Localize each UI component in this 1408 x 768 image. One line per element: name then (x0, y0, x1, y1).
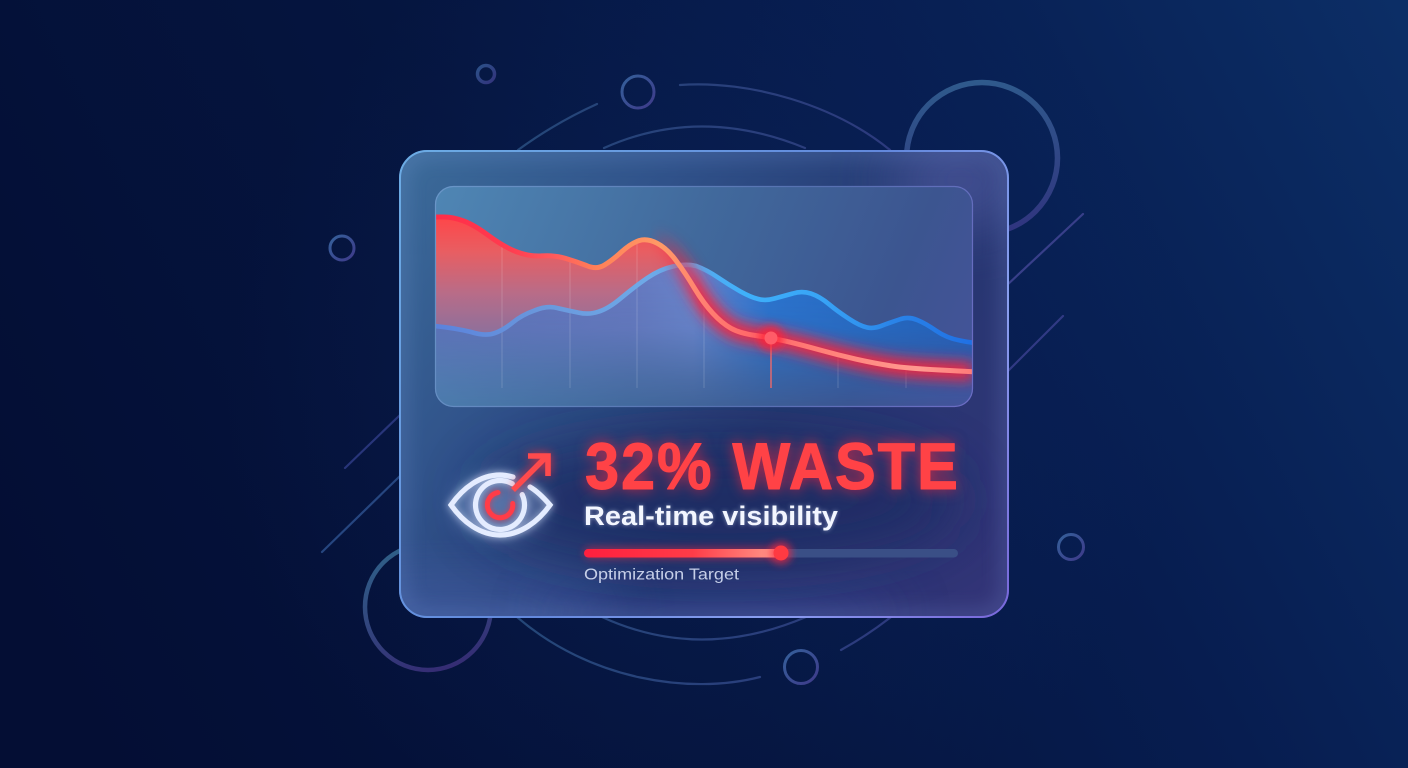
area: red, between the curves (434, 217, 683, 336)
eye glow (454, 476, 546, 536)
card body (399, 150, 1009, 618)
ring: large bottom left (365, 544, 491, 670)
arcs: top (518, 84, 890, 150)
marker stem (770, 340, 772, 388)
arrow (513, 456, 548, 490)
headline: 32% WASTE: 32% WASTE (585, 429, 960, 503)
glass card (399, 150, 1009, 618)
progress glow (584, 547, 781, 559)
progress bar (584, 542, 958, 564)
glow: red series (654, 230, 972, 391)
ring: bottom centre (784, 650, 818, 684)
progress track (584, 549, 958, 558)
chart panel (434, 186, 973, 407)
eye pupil ring (487, 492, 513, 518)
caption: Optimization Target: Optimization Target (584, 566, 740, 584)
arcs: bottom (517, 617, 891, 684)
diagonal lines (322, 214, 1083, 552)
area: under the blue series (436, 267, 972, 394)
progress fill (584, 549, 781, 558)
ring: left (330, 236, 354, 260)
progress knob (774, 546, 788, 560)
progress knob glow (770, 542, 792, 564)
eye outline and iris (451, 475, 550, 535)
marker glow (758, 325, 784, 351)
icon: eye with arrow (451, 456, 550, 536)
chart areas and lines (434, 217, 973, 407)
line: blue series (434, 265, 973, 343)
decorative background rings, arcs and lines (322, 66, 1084, 684)
ring: small top (478, 66, 494, 82)
ring: large top right (906, 82, 1058, 234)
ring: right (1058, 534, 1084, 560)
subheading: Real-time visibility: Real-time visibility (584, 501, 838, 531)
ring: top centre (622, 76, 654, 108)
chart grid lines (502, 244, 906, 388)
marker dot (764, 332, 778, 344)
line: red series (435, 217, 973, 372)
